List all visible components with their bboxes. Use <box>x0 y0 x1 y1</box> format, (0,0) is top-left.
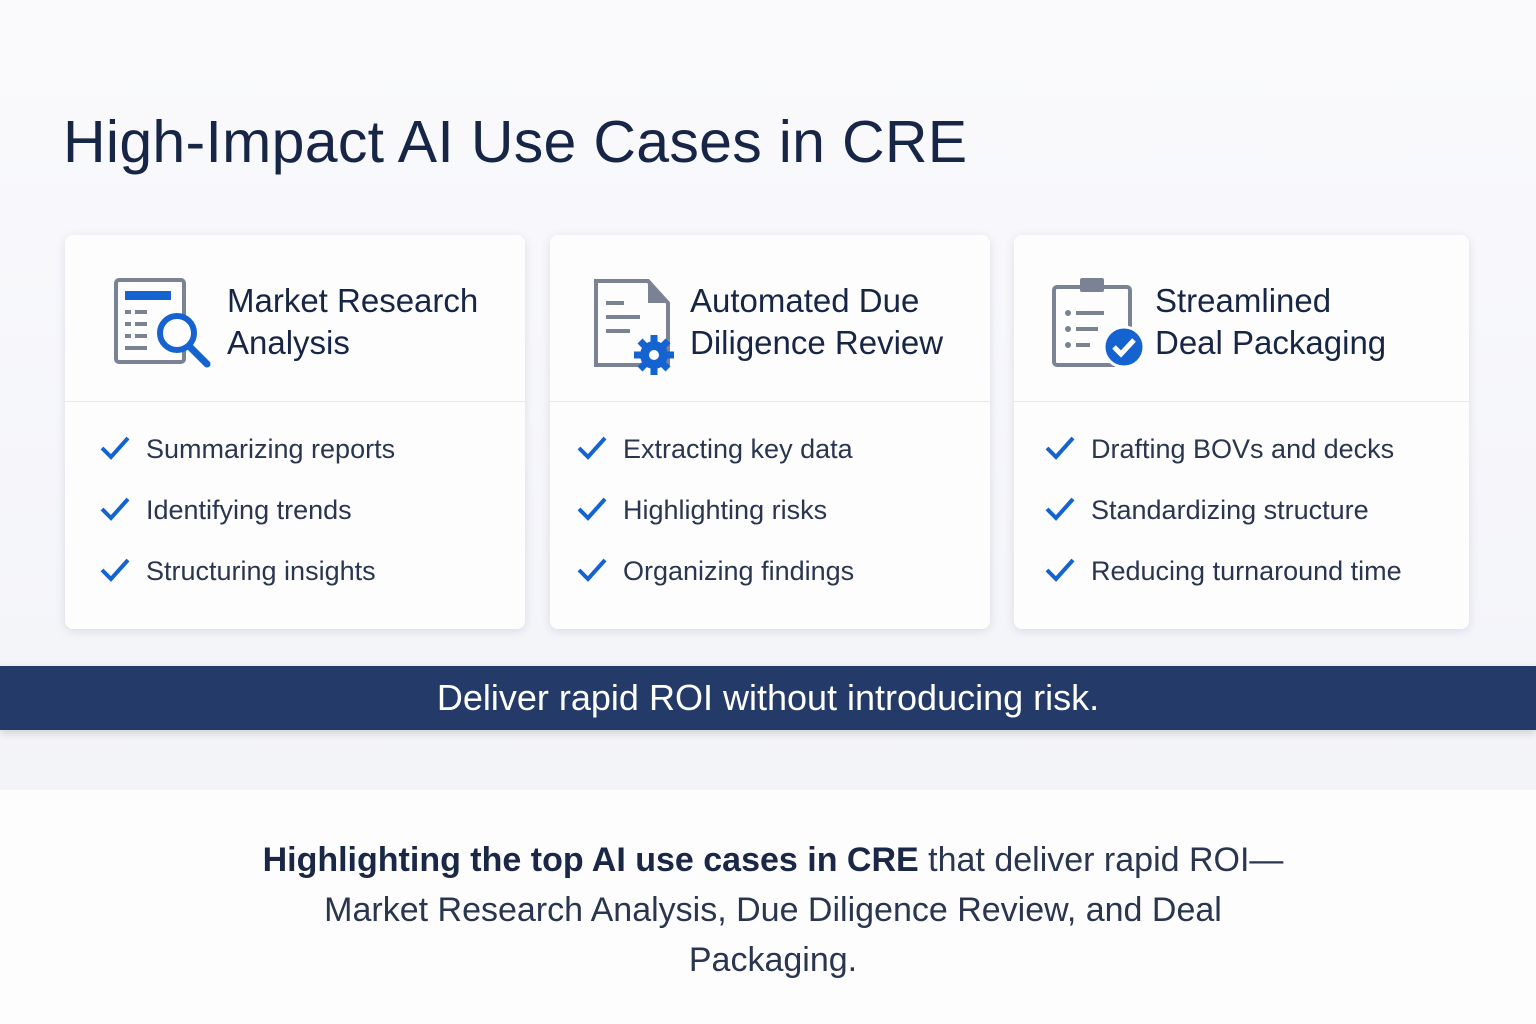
heading <box>227 282 478 361</box>
list: Drafting BOVs and decks <box>1091 434 1394 464</box>
summary text: Highlighting the top AI use cases in CRE that deliver rapid ROI— <box>263 841 1283 879</box>
summary text <box>263 841 1284 979</box>
list: Reducing turnaround time <box>1091 556 1402 586</box>
list <box>578 434 854 586</box>
banner <box>0 666 1536 730</box>
list: Identifying trends <box>146 495 352 525</box>
panel: deal packaging <box>1014 235 1469 629</box>
list <box>100 434 395 586</box>
heading: Automated Due <box>690 282 919 319</box>
heading: Streamlined <box>1155 282 1331 319</box>
heading: Diligence Review <box>690 324 943 361</box>
icon: report magnifier <box>114 278 210 368</box>
list: Extracting key data <box>623 434 853 464</box>
icon: document gear <box>594 279 674 375</box>
summary text: Packaging. <box>689 941 857 979</box>
list: Highlighting risks <box>623 495 827 525</box>
list: Organizing findings <box>623 556 854 586</box>
banner: Deliver rapid ROI without introducing risk. <box>437 677 1099 718</box>
list <box>1046 434 1402 586</box>
list: Structuring insights <box>146 556 376 586</box>
heading <box>690 282 944 361</box>
bottom section <box>0 790 1536 1024</box>
panel: market research <box>65 235 525 629</box>
panel: due diligence <box>550 235 990 629</box>
icon: clipboard check <box>1052 278 1142 367</box>
summary text: Market Research Analysis, Due Diligence Review, and Deal <box>324 891 1222 929</box>
list: Standardizing structure <box>1091 495 1369 525</box>
title: High-Impact AI Use Cases in CRE <box>63 109 967 175</box>
heading: Deal Packaging <box>1155 324 1386 361</box>
list: Summarizing reports <box>146 434 395 464</box>
heading: Analysis <box>227 324 350 361</box>
heading: Market Research <box>227 282 478 319</box>
heading <box>1155 282 1386 361</box>
